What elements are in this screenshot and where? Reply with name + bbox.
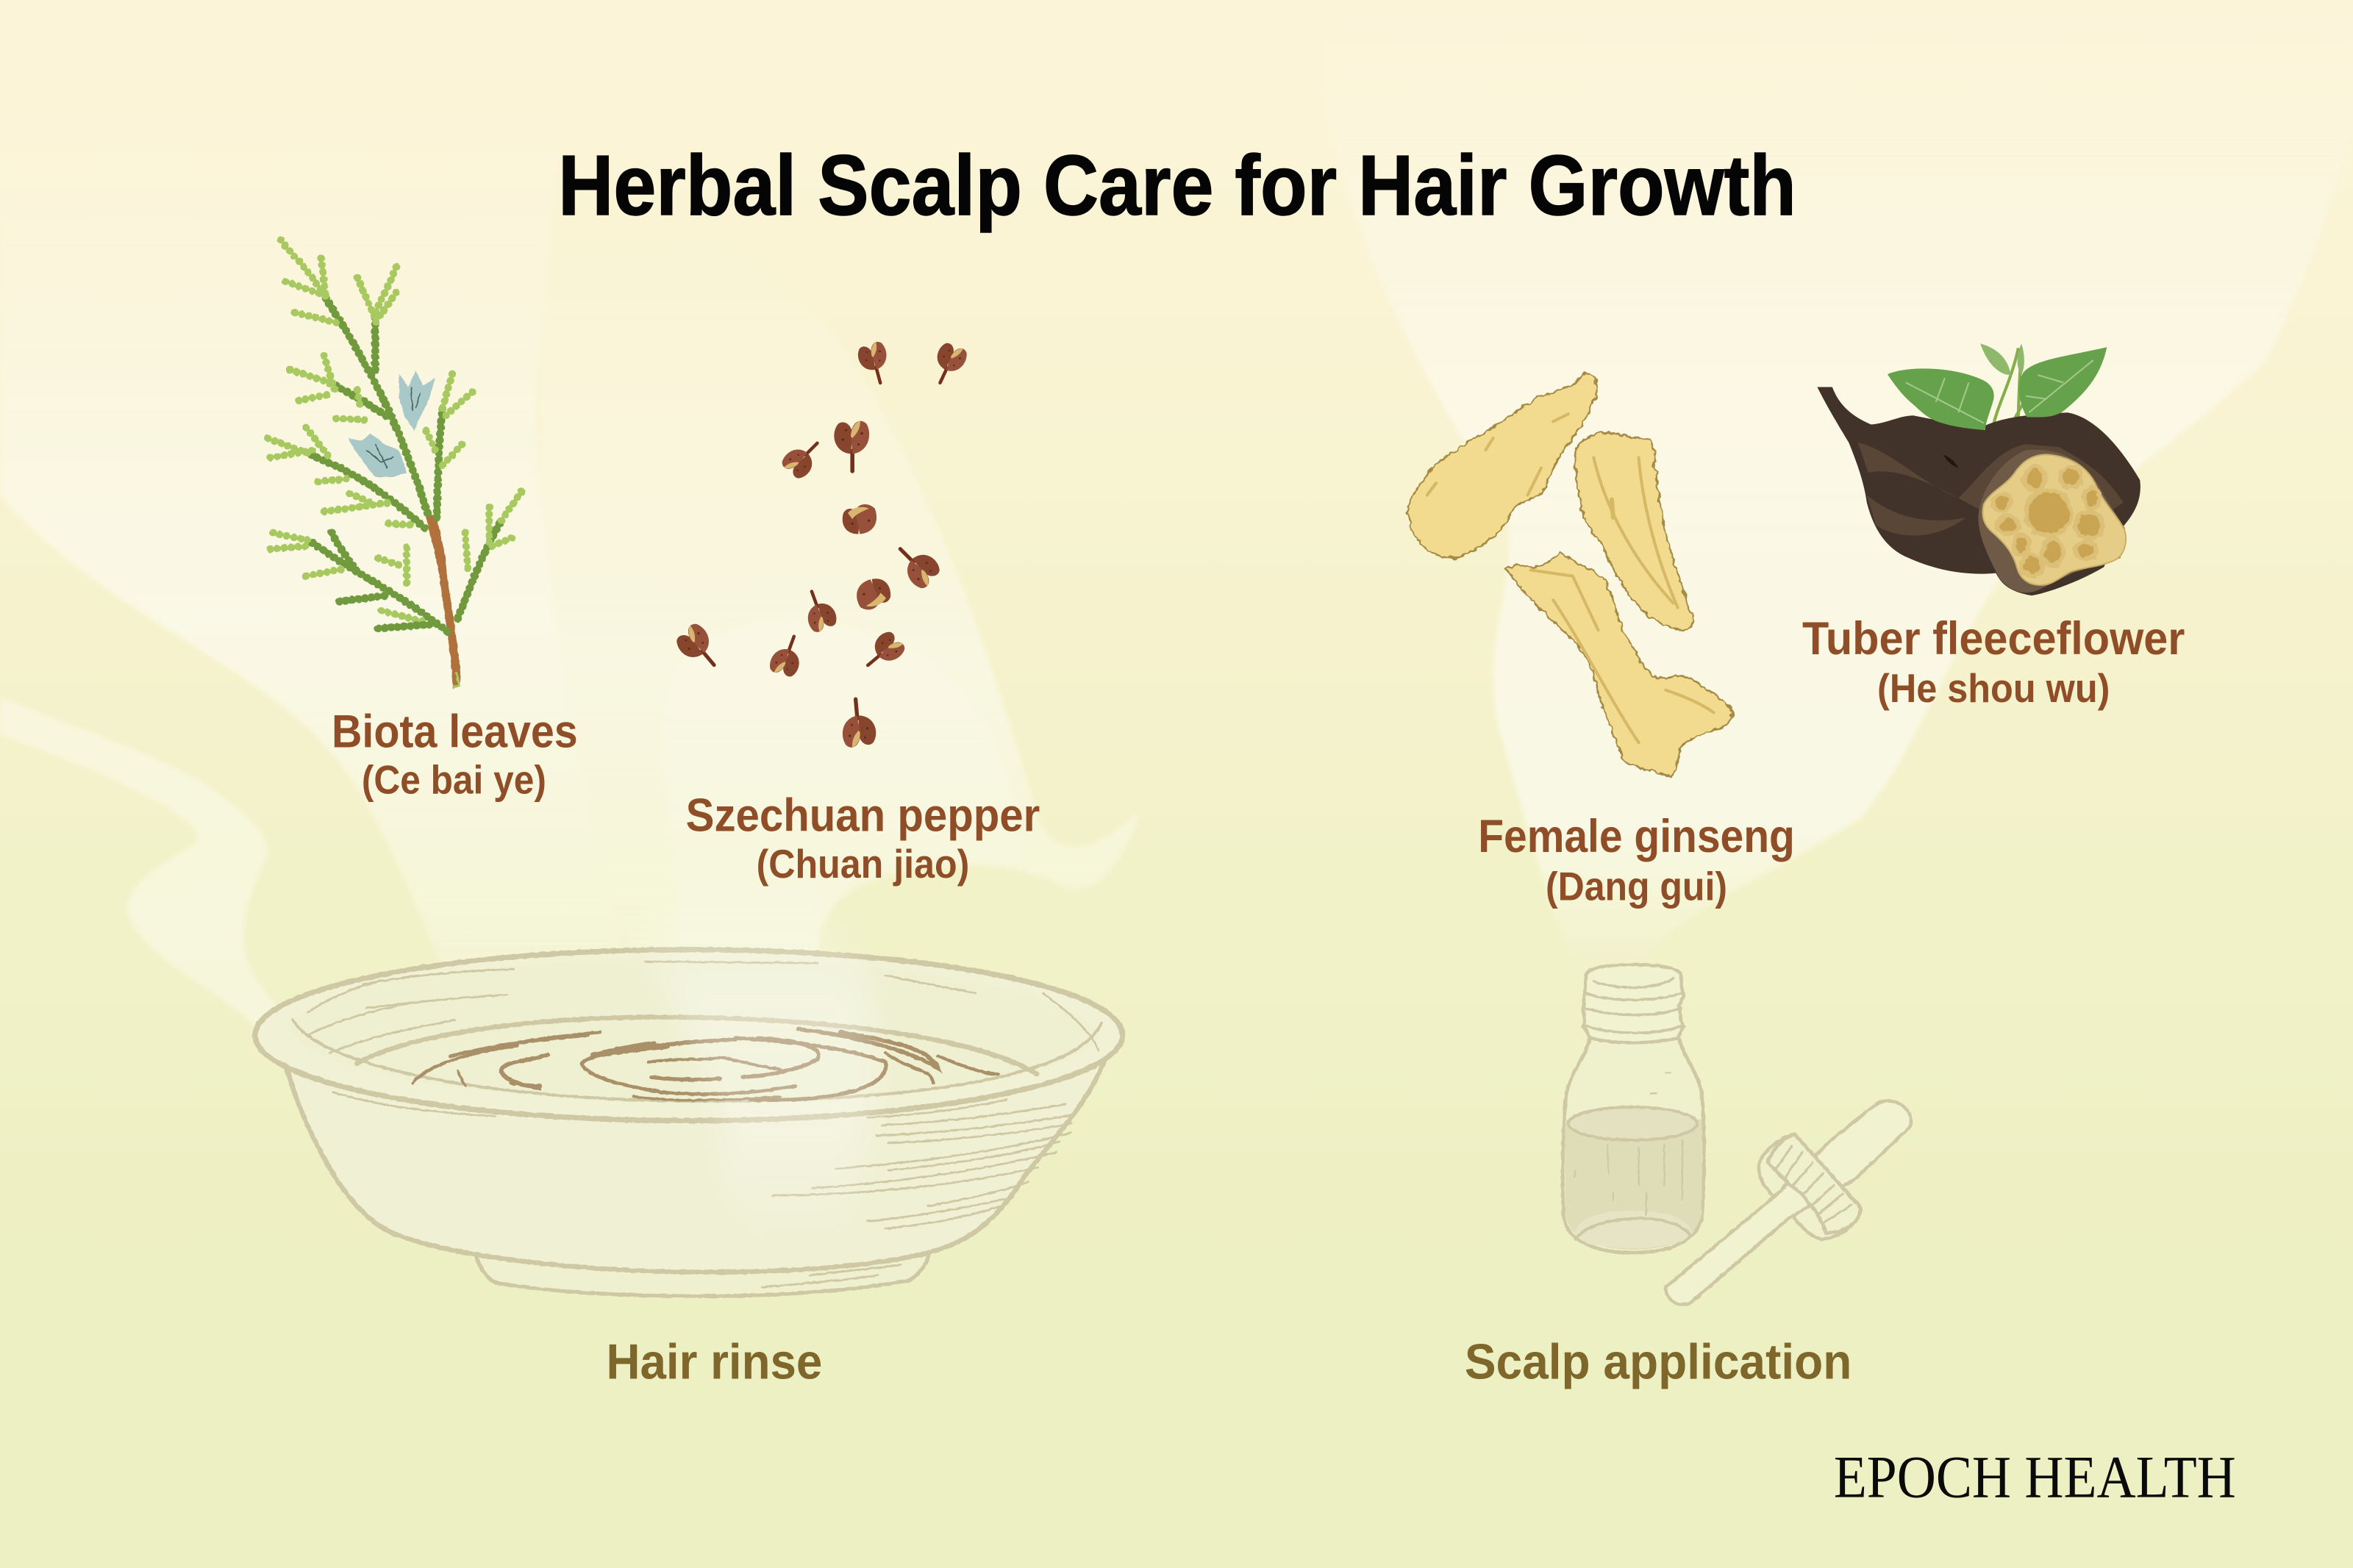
label: tuber fleeceflower: [1802, 613, 2185, 711]
label: tuber fleeceflower: (He shou wu): [1877, 665, 2110, 711]
label: female ginseng: (Dang gui): [1546, 863, 1727, 909]
label: scalp application: Scalp application: [1465, 1334, 1852, 1389]
dropper tube and bulb: [1665, 1101, 1911, 1305]
illustration: bowl for hair rinse: [255, 950, 1123, 1296]
rim: [255, 950, 1123, 1120]
bowl foot: [474, 1248, 931, 1296]
label: tuber fleeceflower: Tuber fleeceflower: [1802, 613, 2185, 665]
bottle body: [1563, 1035, 1704, 1253]
label: female ginseng: Female ginseng: [1478, 811, 1795, 862]
icon: szechuan peppercorns: [672, 340, 970, 748]
label: biota leaves: (Ce bai ye): [362, 757, 546, 803]
bottle liquid: [1565, 1119, 1702, 1250]
bottle neck: [1583, 964, 1684, 1042]
dark inner foliage: [324, 296, 428, 513]
woody stem: [425, 513, 461, 689]
dropper cap back: [1759, 1134, 1861, 1239]
sprout leaves: [1993, 348, 2029, 428]
icon: biota leaves branch: [267, 240, 522, 689]
illustration: oil bottle and dropper: [1563, 964, 1911, 1305]
label: hair rinse: Hair rinse: [606, 1334, 822, 1389]
label: szechuan pepper: [686, 790, 1040, 887]
label: biota leaves: [332, 706, 578, 803]
light outer foliage: [281, 240, 324, 296]
bowl interior: [291, 960, 1099, 1101]
label: szechuan pepper: (Chuan jiao): [757, 841, 969, 887]
bowl hatch lines: [307, 962, 1099, 1053]
blue cones: [399, 370, 435, 431]
leaves: [1888, 368, 1994, 430]
icon: female ginseng slices: [1407, 372, 1733, 777]
bowl body: [282, 1050, 1107, 1272]
tuber body: [1817, 387, 2140, 595]
cut face rim: [1978, 450, 2125, 593]
label: szechuan pepper: Szechuan pepper: [686, 790, 1040, 842]
label: female ginseng: [1478, 811, 1795, 909]
icon: tuber fleeceflower root: [1817, 343, 2140, 595]
logo: Epoch Health: EPOCH HEALTH: [1834, 1444, 2236, 1511]
ginseng surface streaks: [1427, 414, 1568, 495]
water ripples: [413, 1029, 998, 1100]
cut face with blotches: [1982, 454, 2126, 585]
title: Herbal Scalp Care for Hair Growth: [558, 137, 1796, 233]
steam over bowl: [630, 885, 874, 1259]
dropper knurled band: [1768, 1134, 1861, 1234]
label: biota leaves: Biota leaves: [332, 706, 578, 757]
